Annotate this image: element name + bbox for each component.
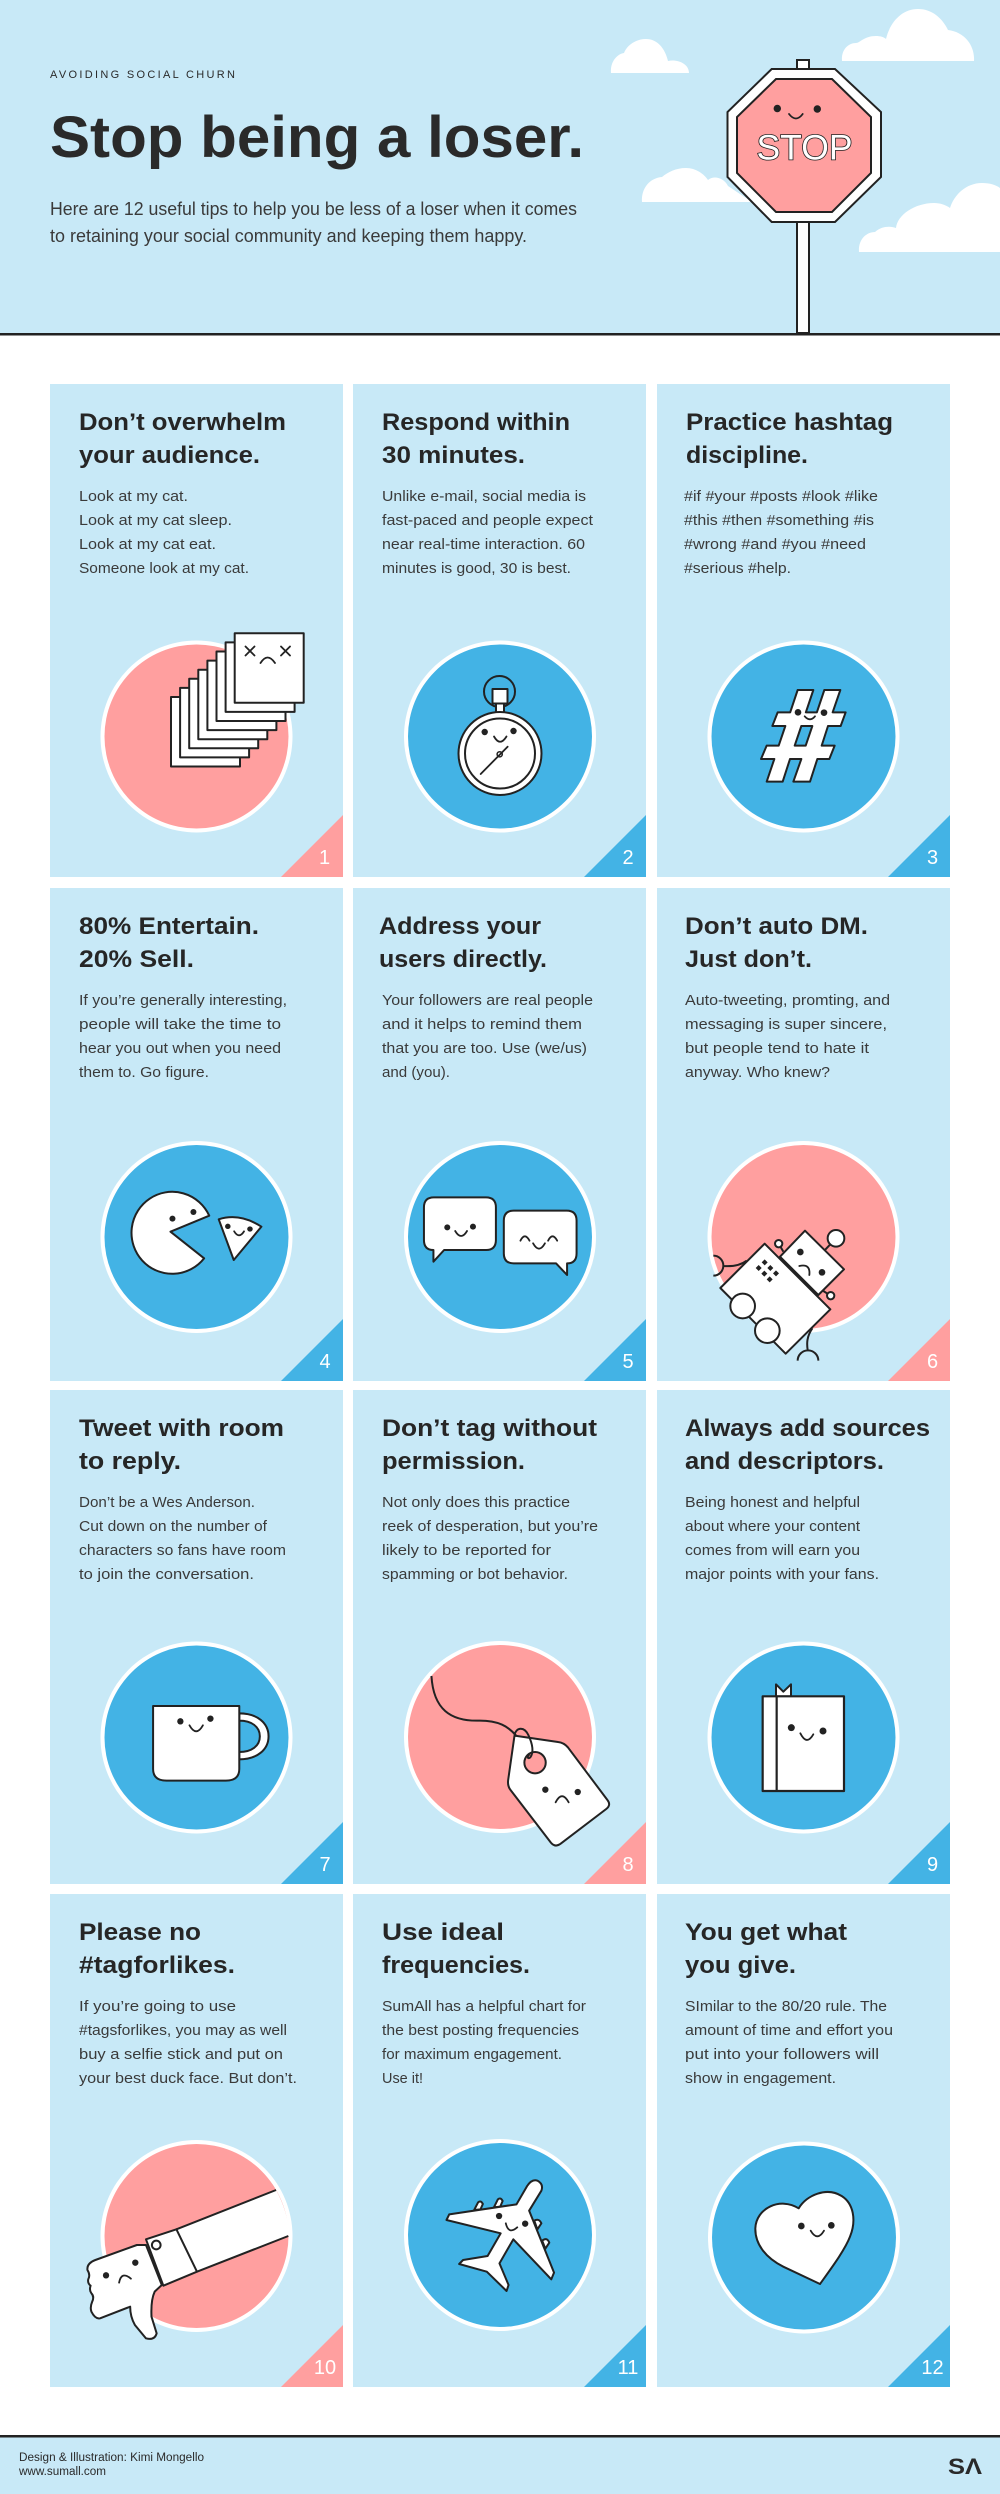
number: 8 bbox=[622, 1854, 634, 1876]
panel: tip 10 bbox=[50, 1894, 343, 2387]
heading: Always add sources bbox=[685, 1415, 930, 1442]
body text: Cut down on the number of bbox=[79, 1518, 268, 1535]
illustration: stopwatch bbox=[404, 640, 596, 832]
heading bbox=[685, 1919, 847, 1979]
body text: but people tend to hate it bbox=[685, 1040, 870, 1057]
body text: #serious #help. bbox=[684, 560, 791, 577]
body text: Someone look at my cat. bbox=[79, 560, 249, 577]
heading: discipline. bbox=[686, 442, 808, 469]
heading bbox=[79, 1919, 235, 1979]
body text bbox=[382, 1998, 586, 2087]
number: 1 bbox=[319, 847, 330, 869]
body text: #if #your #posts #look #like bbox=[684, 488, 878, 505]
body text: spamming or bot behavior. bbox=[382, 1566, 568, 1583]
body text bbox=[684, 488, 878, 577]
heading bbox=[382, 1415, 597, 1475]
heading bbox=[382, 1919, 530, 1979]
intro text bbox=[50, 199, 577, 246]
body text: and (you). bbox=[382, 1064, 450, 1081]
logo: SΛ bbox=[948, 2454, 982, 2479]
number: 6 bbox=[927, 1351, 938, 1373]
eyebrow: AVOIDING SOCIAL CHURN bbox=[50, 69, 235, 81]
body text: major points with your fans. bbox=[685, 1566, 879, 1583]
illustration: speech bubbles bbox=[404, 1141, 596, 1333]
title: Stop being a loser. bbox=[50, 105, 584, 170]
number: 12 bbox=[921, 2357, 944, 2379]
footer credits bbox=[18, 2452, 204, 2478]
heading: Don’t tag without bbox=[382, 1415, 597, 1442]
heading: 20% Sell. bbox=[79, 946, 194, 973]
panel: tip 8 bbox=[353, 1390, 646, 1884]
body text: If you’re generally interesting, bbox=[79, 992, 287, 1009]
body text: #wrong #and #you #need bbox=[684, 536, 866, 553]
body text: Look at my cat sleep. bbox=[79, 512, 232, 529]
body text: Auto-tweeting, promting, and bbox=[685, 992, 890, 1009]
heading: 80% Entertain. bbox=[79, 913, 259, 940]
icon: stop sign: STOP bbox=[756, 128, 852, 168]
illustration: mug bbox=[100, 1642, 292, 1834]
heading: Don’t auto DM. bbox=[685, 913, 868, 940]
illustration: stack of pages bbox=[100, 633, 304, 832]
body text: your best duck face. But don’t. bbox=[79, 2070, 297, 2087]
body text: #this #then #something #is bbox=[684, 512, 874, 529]
number: 2 bbox=[622, 847, 634, 869]
body text: near real-time interaction. 60 bbox=[382, 536, 585, 553]
panel: tip 9 bbox=[657, 1390, 950, 1884]
heading: Use ideal bbox=[382, 1919, 504, 1946]
number: 3 bbox=[927, 847, 938, 869]
heading bbox=[79, 1415, 284, 1475]
body text: Look at my cat eat. bbox=[79, 536, 216, 553]
icon: stop sign bbox=[728, 60, 881, 333]
number: 7 bbox=[319, 1854, 331, 1876]
body text: Being honest and helpful bbox=[685, 1494, 860, 1511]
illustration: book bbox=[708, 1642, 900, 1834]
body text bbox=[79, 1998, 297, 2087]
body text: hear you out when you need bbox=[79, 1040, 281, 1057]
body text: put into your followers will bbox=[685, 2046, 879, 2063]
body text: SImilar to the 80/20 rule. The bbox=[685, 1998, 887, 2015]
body text: the best posting frequencies bbox=[382, 2022, 579, 2039]
body text: and it helps to remind them bbox=[382, 1016, 582, 1033]
heading: Just don’t. bbox=[685, 946, 812, 973]
body text: characters so fans have room bbox=[79, 1542, 286, 1559]
body text bbox=[685, 992, 890, 1081]
body text bbox=[382, 992, 593, 1081]
heading: 30 minutes. bbox=[382, 442, 525, 469]
number: 4 bbox=[319, 1351, 331, 1373]
heading: Respond within bbox=[382, 409, 570, 436]
number: 10 bbox=[314, 2357, 336, 2379]
illustration: price tag bbox=[404, 1641, 609, 1846]
heading: permission. bbox=[382, 1448, 525, 1475]
body text bbox=[685, 1494, 879, 1583]
body text: Your followers are real people bbox=[382, 992, 593, 1009]
body text: Not only does this practice bbox=[382, 1494, 570, 1511]
body text: likely to be reported for bbox=[382, 1542, 551, 1559]
body text: for maximum engagement. bbox=[382, 2046, 562, 2063]
body text: Unlike e-mail, social media is bbox=[382, 488, 586, 505]
body text: fast-paced and people expect bbox=[382, 512, 594, 529]
body text bbox=[79, 488, 249, 577]
heading: Address your bbox=[379, 913, 541, 940]
intro text: Here are 12 useful tips to help you be less of a loser when it comes bbox=[50, 199, 577, 219]
body text: messaging is super sincere, bbox=[685, 1016, 887, 1033]
body text: Don’t be a Wes Anderson. bbox=[79, 1494, 255, 1511]
body text bbox=[79, 1494, 286, 1583]
body text: about where your content bbox=[685, 1518, 861, 1535]
footer bbox=[0, 2435, 1000, 2494]
heading: you give. bbox=[685, 1952, 796, 1979]
body text: minutes is good, 30 is best. bbox=[382, 560, 571, 577]
heading: to reply. bbox=[79, 1448, 181, 1475]
body text: people will take the time to bbox=[79, 1016, 281, 1033]
panel: tip 5 bbox=[353, 888, 646, 1381]
panel: tip 12 bbox=[657, 1894, 950, 2387]
clouds bbox=[611, 9, 1000, 252]
illustration: robot bbox=[708, 1141, 900, 1361]
panel: tip 2 bbox=[353, 384, 646, 877]
body text: SumAll has a helpful chart for bbox=[382, 1998, 586, 2015]
heading bbox=[685, 1415, 930, 1475]
heading: users directly. bbox=[379, 946, 547, 973]
number: 9 bbox=[927, 1854, 938, 1876]
panel: tip 7 bbox=[50, 1390, 343, 1884]
intro text: to retaining your social community and keeping them happy. bbox=[50, 226, 527, 246]
footer credits: Design & Illustration: Kimi Mongello bbox=[19, 2452, 204, 2464]
body text bbox=[382, 488, 594, 577]
panel: tip 6 bbox=[657, 888, 950, 1381]
footer credits: www.sumall.com bbox=[18, 2466, 106, 2478]
body text bbox=[382, 1494, 598, 1583]
heading: Please no bbox=[79, 1919, 201, 1946]
body text: #tagsforlikes, you may as well bbox=[79, 2022, 287, 2039]
body text: amount of time and effort you bbox=[685, 2022, 893, 2039]
body text: comes from will earn you bbox=[685, 1542, 860, 1559]
body text: reek of desperation, but you’re bbox=[382, 1518, 598, 1535]
panel: tip 3 bbox=[657, 384, 950, 877]
body text: to join the conversation. bbox=[79, 1566, 254, 1583]
panel: tip 4 bbox=[50, 888, 343, 1381]
heading bbox=[79, 913, 259, 973]
heading bbox=[379, 913, 547, 973]
number: 5 bbox=[622, 1351, 634, 1373]
heading: #tagforlikes. bbox=[79, 1952, 235, 1979]
body text: Look at my cat. bbox=[79, 488, 188, 505]
header banner bbox=[0, 0, 1000, 333]
heading: You get what bbox=[685, 1919, 847, 1946]
illustration: pac-man and pizza slice bbox=[100, 1141, 292, 1333]
body text: them to. Go figure. bbox=[79, 1064, 209, 1081]
heading: Don’t overwhelm bbox=[79, 409, 286, 436]
illustration: thumbs down bbox=[87, 2140, 292, 2339]
number: 11 bbox=[618, 2357, 638, 2379]
heading: your audience. bbox=[79, 442, 260, 469]
heading bbox=[685, 913, 868, 973]
heading: Tweet with room bbox=[79, 1415, 284, 1442]
body text: Use it! bbox=[382, 2070, 423, 2087]
heading: and descriptors. bbox=[685, 1448, 884, 1475]
body text: that you are too. Use (we/us) bbox=[382, 1040, 587, 1057]
heading bbox=[382, 409, 570, 469]
panel: tip 11 bbox=[353, 1894, 646, 2387]
panel: tip 1 bbox=[50, 384, 343, 877]
body text: show in engagement. bbox=[685, 2070, 836, 2087]
heading: frequencies. bbox=[382, 1952, 530, 1979]
heading: Practice hashtag bbox=[686, 409, 893, 436]
illustration: airplane bbox=[404, 2139, 596, 2331]
body text: anyway. Who knew? bbox=[685, 1064, 830, 1081]
body text: buy a selfie stick and put on bbox=[79, 2046, 283, 2063]
body text bbox=[685, 1998, 893, 2087]
illustration: heart bbox=[708, 2142, 900, 2334]
body text: If you’re going to use bbox=[79, 1998, 236, 2015]
body text bbox=[79, 992, 287, 1081]
illustration: hashtag bbox=[708, 640, 900, 832]
heading bbox=[686, 409, 893, 469]
heading bbox=[79, 409, 286, 469]
